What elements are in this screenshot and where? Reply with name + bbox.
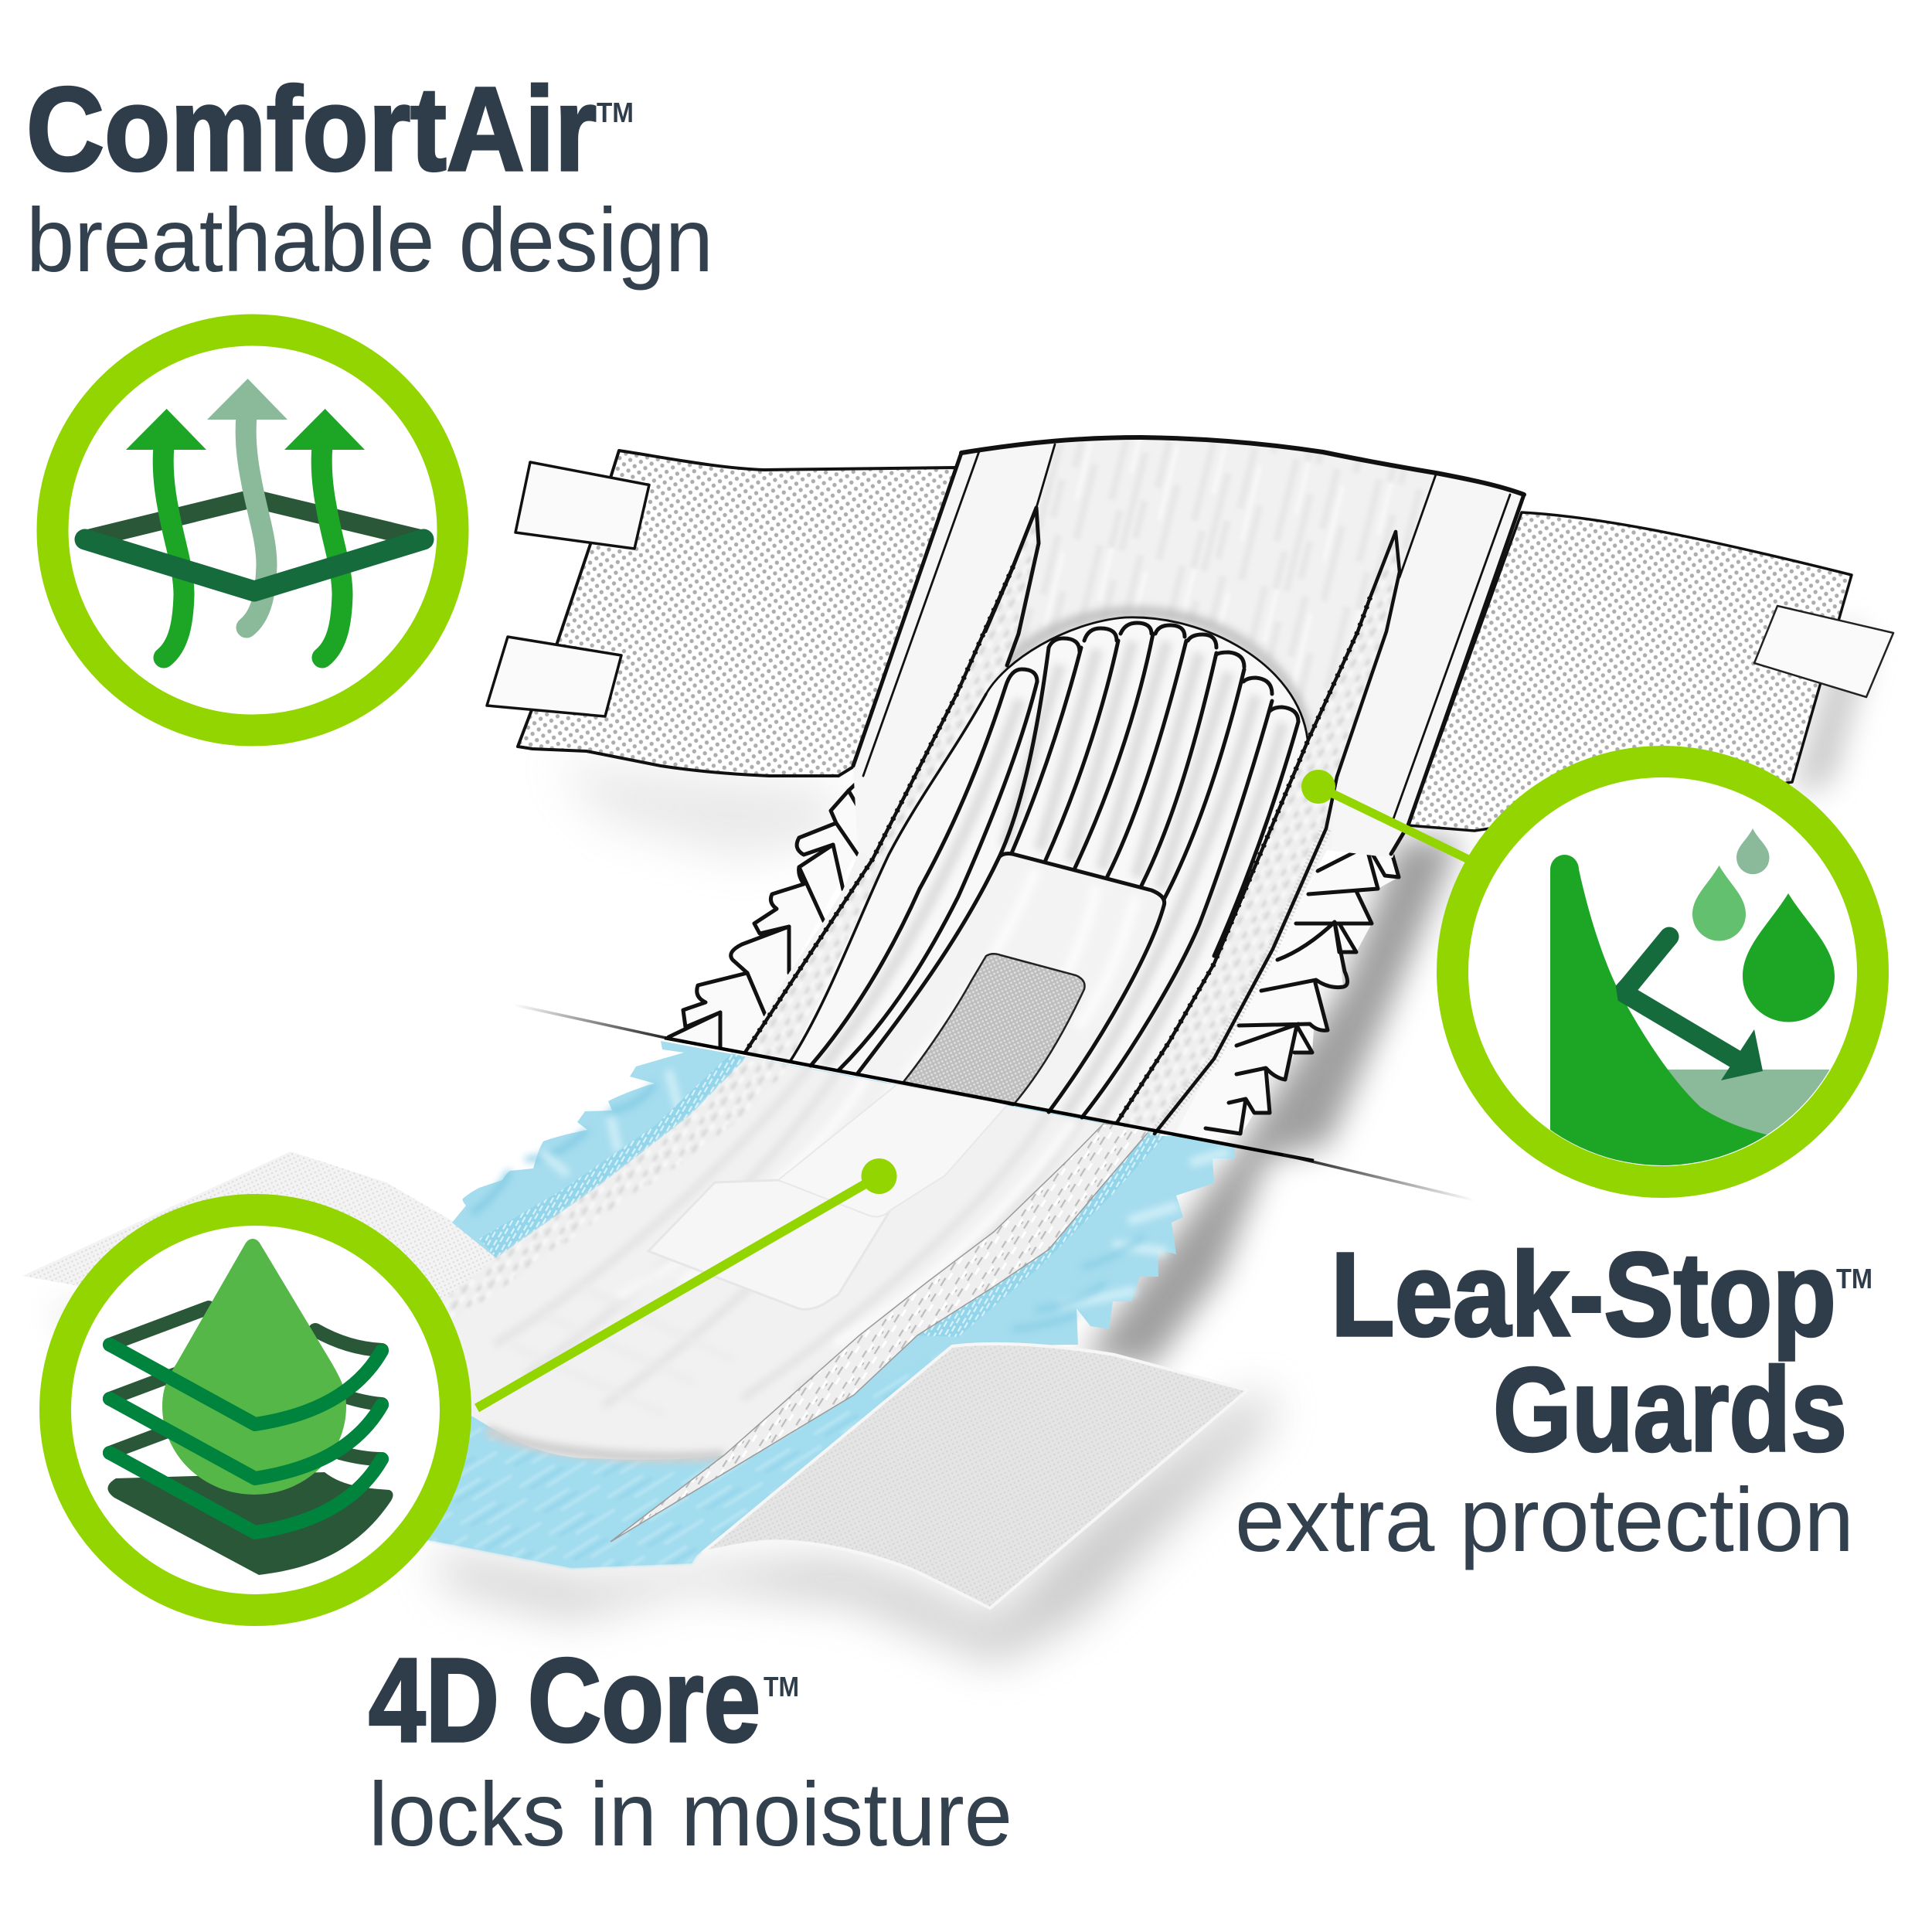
guard texture right — [1117, 532, 1400, 1134]
right ruffles line art — [1159, 846, 1399, 1136]
subtitle: locks in moisture: locks in moisture — [369, 1764, 1012, 1865]
icon: 4D core layers — [56, 1210, 456, 1611]
icon: leak guard — [1453, 762, 1873, 1190]
core lines — [745, 437, 1524, 1134]
waist panel and core silhouette — [745, 437, 1524, 1136]
section cut line — [513, 1005, 1475, 1200]
blue stitched trim right — [917, 1128, 1168, 1337]
title: 4D Core: 4D Core — [369, 1634, 760, 1767]
trademark: Leak-Stop: TM — [1836, 1263, 1872, 1294]
lower pad patch, large — [648, 1180, 890, 1309]
subtitle: breathable design: breathable design — [26, 189, 713, 291]
centre patch — [857, 854, 1165, 1112]
trademark: 4D Core: TM — [764, 1671, 799, 1702]
lower pad cross stripes — [510, 1283, 734, 1414]
right side smooth strip — [1331, 473, 1524, 858]
bottom nonwoven sheet, right — [702, 1344, 1247, 1608]
right waist wing — [1408, 512, 1852, 831]
title: Guards: Guards — [1493, 1343, 1847, 1476]
dome soft shadow — [986, 612, 1308, 740]
pleat shading — [823, 641, 1283, 1121]
lower absorbent pad — [417, 1057, 1152, 1542]
left wing upper tab — [515, 462, 649, 549]
connector: leak guards — [1301, 770, 1468, 859]
pad interior — [790, 617, 1308, 1123]
pleat tops — [1005, 623, 1298, 722]
icon: breathable airflow — [53, 330, 453, 730]
patch stripes — [904, 869, 1136, 1078]
guard texture left — [745, 508, 1039, 1062]
textured waist area — [986, 440, 1436, 740]
blue stitched trim left — [479, 1053, 747, 1258]
title: Leak-Stop: Leak-Stop — [1331, 1228, 1836, 1361]
connector: 4D core — [477, 1158, 896, 1408]
blue backsheet and ruffles — [402, 1041, 1235, 1568]
lower guard left — [444, 1057, 790, 1320]
bottom nonwoven sheet, left — [22, 1151, 496, 1410]
left wing lower tab — [487, 637, 621, 716]
grey absorbent patch — [903, 954, 1085, 1105]
left side smooth strip — [853, 444, 1055, 859]
trademark: ComfortAir: TM — [597, 97, 634, 128]
title: ComfortAir: ComfortAir — [26, 63, 597, 196]
right wing tab — [1754, 606, 1893, 697]
upper body line art — [745, 437, 1524, 1136]
stitched edge right — [1155, 828, 1326, 1134]
left waist wing — [518, 451, 957, 776]
subtitle: extra protection: extra protection — [1235, 1469, 1854, 1570]
lower guard right — [611, 1124, 1152, 1542]
cast shadows — [46, 618, 1866, 1662]
left ruffles line art — [668, 773, 870, 1053]
lower pad patch, textured — [778, 1084, 1008, 1216]
